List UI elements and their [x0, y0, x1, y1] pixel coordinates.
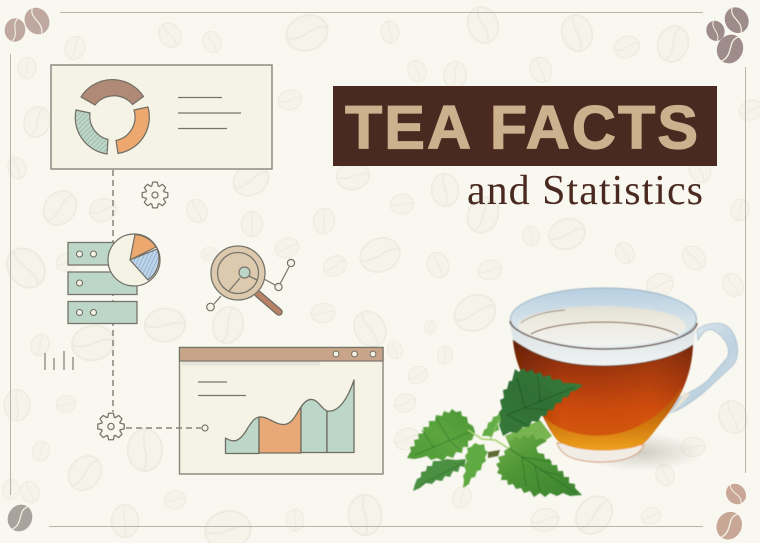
text placeholder lines — [198, 382, 246, 396]
leaf: bottom left dark — [413, 459, 466, 491]
tea body — [513, 340, 693, 450]
text placeholder lines — [178, 98, 241, 128]
liquid line — [531, 322, 678, 335]
tea cup photo — [510, 288, 738, 471]
small bar marks — [45, 351, 73, 370]
leaf: small upper — [482, 412, 502, 437]
title text: TEA FACTS — [345, 94, 698, 162]
cup shadow — [578, 433, 702, 471]
title banner — [333, 86, 717, 166]
leaf: top large — [499, 368, 583, 436]
icon: magnifier with network — [207, 246, 295, 312]
handle — [670, 323, 738, 413]
leaf: bottom large — [496, 434, 582, 497]
rim outer ellipse — [510, 288, 696, 350]
horizontal dashed connector with end dot — [126, 425, 208, 431]
subtitle: and Statistics — [467, 168, 703, 214]
glass base below tea line — [663, 392, 690, 420]
icon: gear lower — [98, 413, 124, 440]
leaf: small left — [463, 443, 488, 488]
window header bar — [180, 348, 383, 361]
glass foot — [557, 443, 644, 462]
stem shadow — [488, 450, 500, 458]
rim front line — [510, 321, 697, 349]
area chart — [226, 380, 354, 454]
panel: area chart window — [180, 348, 383, 474]
corner bean: bottom left — [3, 501, 37, 535]
corner beans: bottom right — [712, 480, 750, 543]
corner beans: top left — [4, 3, 54, 43]
leaf: left — [407, 409, 475, 461]
tea surface line — [513, 340, 693, 366]
glass band above tea — [510, 322, 697, 366]
icon: gear upper — [142, 182, 168, 208]
pie chart — [108, 234, 160, 286]
corner beans: top right — [703, 3, 753, 68]
icon: server stack with pie — [68, 234, 160, 324]
leaf: center light — [505, 420, 552, 450]
nettle leaves — [407, 368, 583, 497]
donut chart — [75, 80, 149, 154]
inner glass — [518, 306, 686, 346]
vertical dashed connector — [112, 170, 114, 412]
amber crescent at bottom of tea — [545, 387, 682, 450]
panel: donut chart card — [51, 65, 272, 169]
leaf veins and stems — [415, 376, 576, 493]
